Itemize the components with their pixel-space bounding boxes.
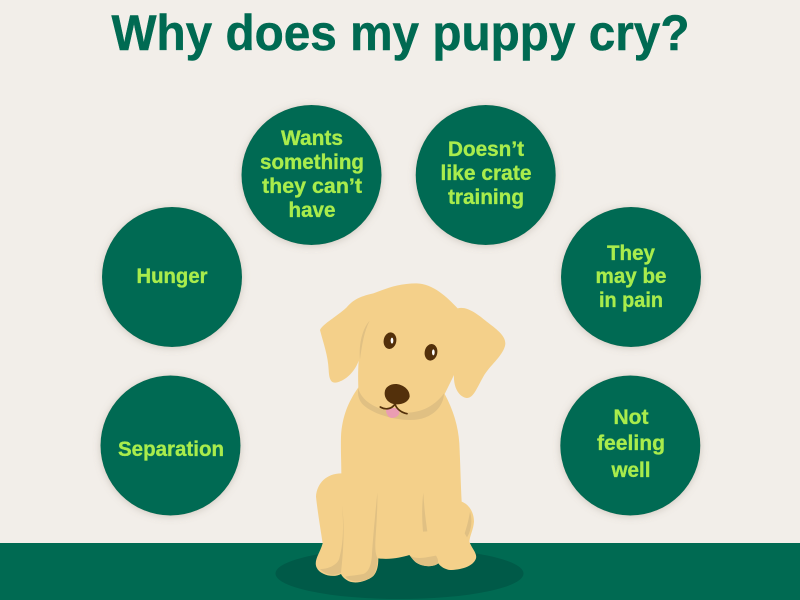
circle: wants something: they can’t (262, 175, 362, 198)
circle: crate training (416, 105, 556, 245)
circle: separation: Separation (118, 438, 224, 461)
circle: pain: may be (596, 265, 666, 288)
circle: wants something: something (260, 151, 364, 174)
circle: not feeling well: Not (614, 406, 648, 429)
tongue (386, 408, 399, 418)
circle: not feeling well: well (611, 459, 650, 482)
circle: crate training: like crate (440, 162, 532, 185)
circle: not feeling well (560, 376, 700, 516)
circle: crate training: training (448, 186, 524, 209)
title: Why does my puppy cry? (112, 5, 690, 61)
circle: not feeling well: feeling (597, 432, 665, 455)
circle: pain: They (607, 242, 655, 265)
nose (385, 384, 410, 404)
right eye (423, 343, 439, 362)
ear fold (360, 321, 370, 359)
circle: hunger (102, 207, 242, 347)
circle: hunger: Hunger (136, 265, 208, 288)
puppy silhouette (316, 283, 505, 582)
circle: pain (561, 207, 701, 347)
collar (358, 388, 444, 420)
circle: crate training: Doesn’t (448, 138, 524, 161)
circle: wants something: Wants (281, 127, 343, 150)
puppy illustration (316, 283, 505, 582)
circle: pain: in pain (599, 289, 663, 312)
left eye (382, 331, 398, 350)
shading: back paw (410, 556, 438, 566)
circle: wants something (242, 105, 382, 245)
dog shadow (276, 548, 524, 599)
circle: separation (100, 376, 240, 516)
mouth (380, 404, 407, 414)
circle: wants something: have (288, 199, 336, 222)
floor (0, 543, 800, 600)
shading: legs (320, 493, 471, 581)
